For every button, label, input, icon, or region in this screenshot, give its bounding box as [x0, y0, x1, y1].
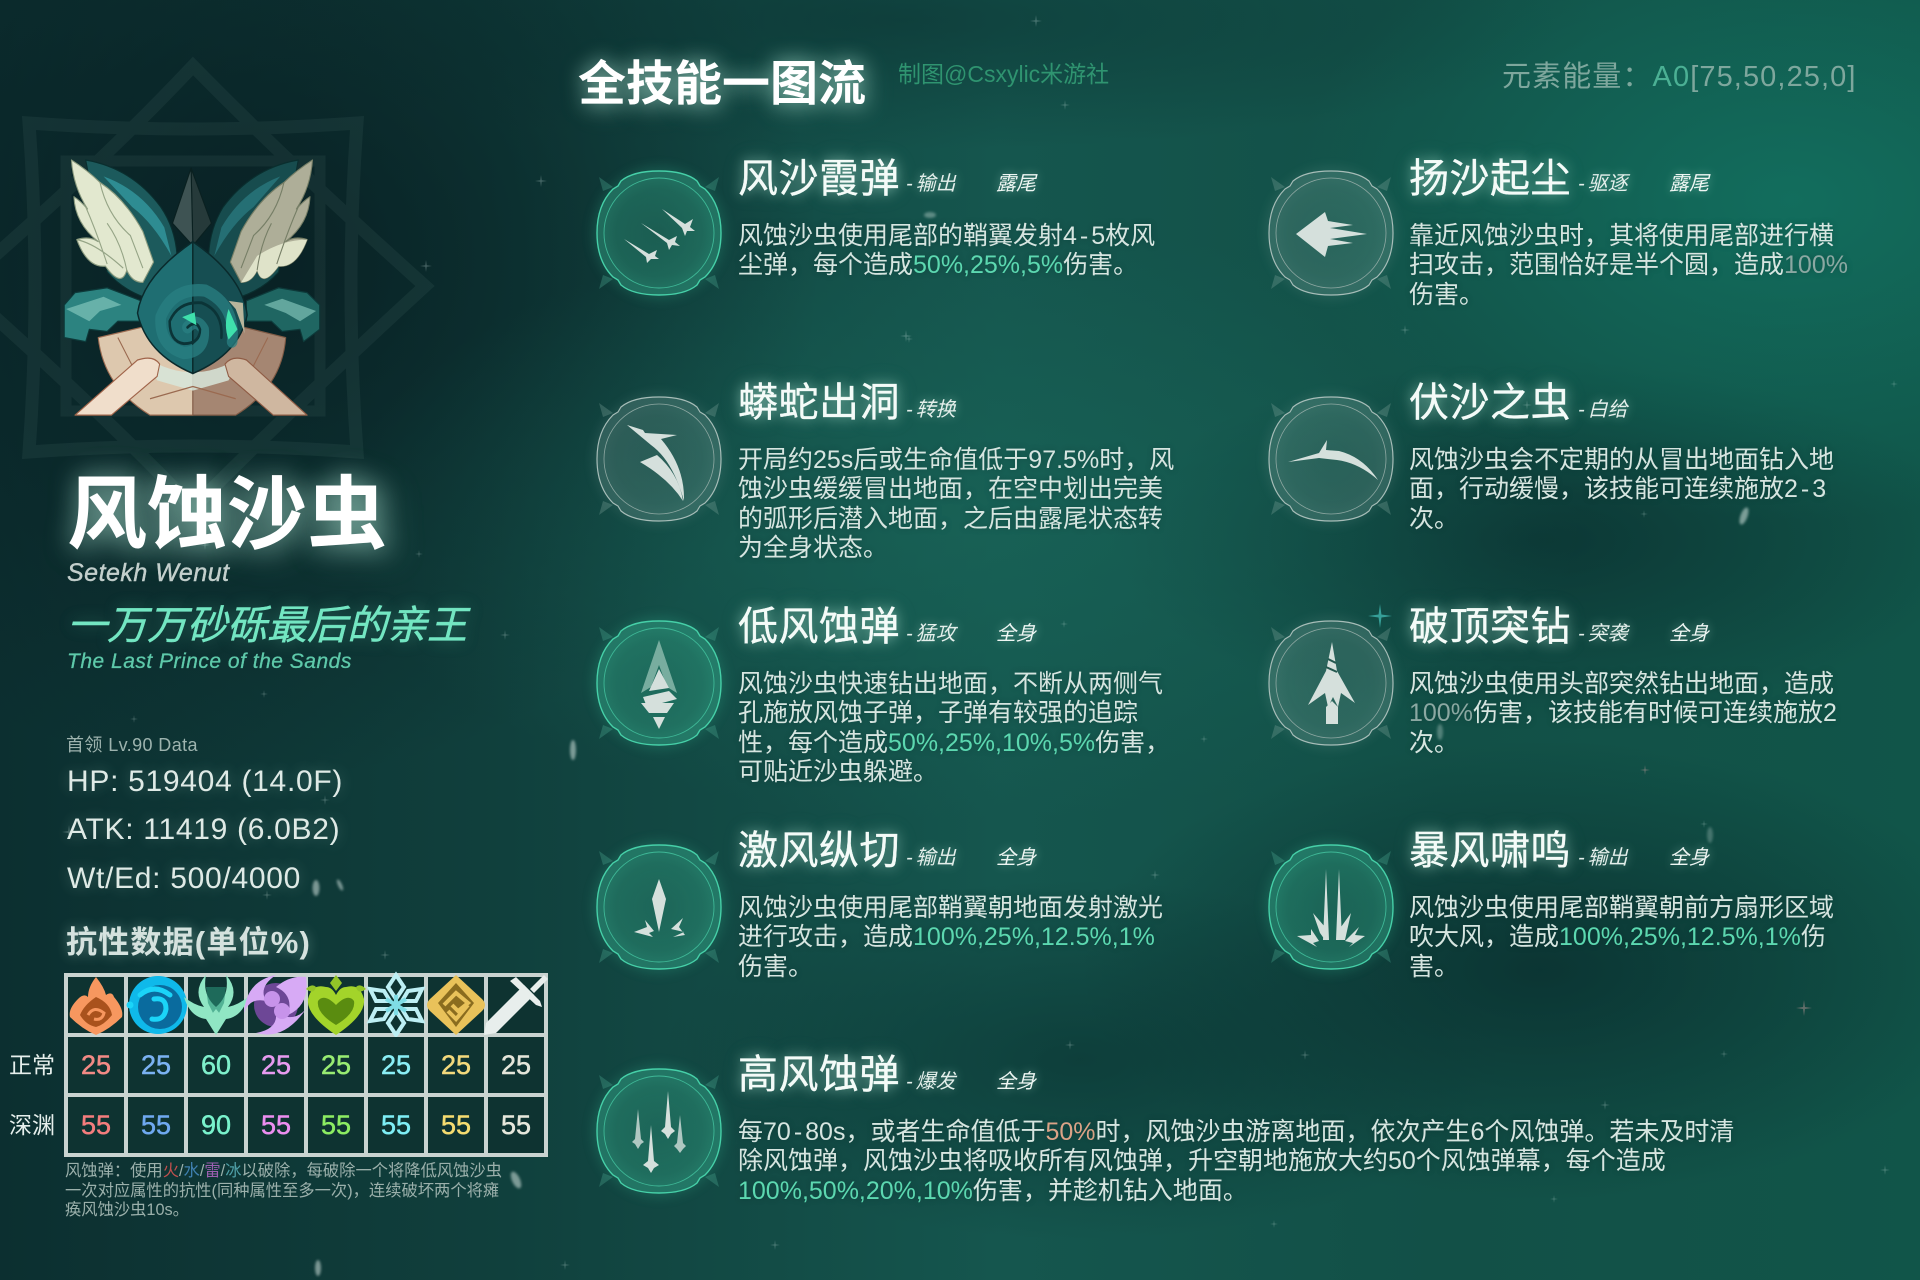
skill description: 开局约25s后或生命值低于97.5%时，风: [738, 446, 1174, 474]
icon: anemo: [188, 977, 244, 1033]
skill description: 伤害。: [738, 953, 813, 981]
resistance table: 25: [321, 1050, 351, 1080]
author credit: 制图@Csxylic米游社: [898, 61, 1109, 87]
skill role: -猛攻: [906, 623, 956, 645]
skill: 蟒蛇出洞: [593, 376, 1368, 562]
skill description: 为全身状态。: [738, 534, 888, 562]
icon: cryo: [368, 977, 424, 1033]
skill description: 风蚀沙虫使用头部突然钻出地面，造成: [1409, 670, 1834, 698]
resistance table: 25: [141, 1050, 171, 1080]
skill description: 除风蚀弹，风蚀沙虫将吸收所有风蚀弹，升空朝地施放大约50个风蚀弹幕，每个造成: [738, 1147, 1666, 1175]
skill description: 靠近风蚀沙虫时，其将使用尾部进行横: [1409, 222, 1834, 250]
cream feathers left: [71, 160, 154, 282]
table footnote: [65, 1162, 502, 1219]
dark wing backs: [86, 160, 177, 297]
skill: 风沙霞弹: [590, 152, 1394, 970]
abyss values: [68, 1097, 124, 1153]
skill role: -转换: [906, 399, 956, 421]
skill description: 风蚀沙虫使用尾部鞘翼朝地面发射激光: [738, 894, 1163, 922]
skill name: 激风纵切: [738, 829, 900, 873]
skill description: [1409, 894, 1834, 982]
english epithet: The Last Prince of the Sands: [67, 650, 352, 673]
resistance table: 25: [501, 1050, 531, 1080]
resistance table: [64, 973, 548, 1157]
boss portrait: [64, 159, 320, 416]
icon: hydro: [128, 977, 184, 1033]
crown spike: [191, 168, 211, 246]
background knot emblem: [0, 57, 434, 1034]
icon: curved tail: [593, 393, 1362, 525]
skill description: 伤害。: [1409, 281, 1484, 309]
skill role: -输出: [906, 847, 956, 869]
teal side plumes: [64, 288, 141, 342]
resistance table: 90: [201, 1110, 231, 1140]
skill description: 性，每个造成50%,25%,10%,5%伤害，: [738, 729, 1170, 757]
resistance heading: 抗性数据(单位%): [66, 925, 311, 960]
boss level label: 首领 Lv.90 Data: [66, 735, 198, 755]
skill state: 全身: [996, 847, 1036, 869]
skill state: 全身: [1669, 847, 1709, 869]
skill description: 进行攻击，造成100%,25%,12.5%,1%: [738, 923, 1155, 951]
skill description: 风蚀沙虫快速钻出地面，不断从两侧气: [738, 670, 1163, 698]
skill description: 可贴近沙虫躲避。: [738, 758, 938, 786]
skill description: 孔施放风蚀子弹，子弹有较强的追踪: [738, 699, 1138, 727]
skill description: 风蚀沙虫会不定期的从冒出地面钻入地: [1409, 446, 1834, 474]
skill: 激风纵切: [591, 824, 1368, 981]
atk stat: ATK: 11419 (6.0B2): [67, 813, 340, 846]
skill description: 的弧形后潜入地面，之后由露尾状态转: [738, 505, 1163, 533]
skill name: 风沙霞弹: [738, 157, 900, 201]
table footnote: 一次对应属性的抗性(同种属性至多一次)，连续破坏两个将瘫: [65, 1182, 499, 1200]
resistance table: 55: [321, 1110, 351, 1140]
icon: three darts: [590, 164, 1362, 302]
resistance table: 25: [441, 1050, 471, 1080]
normal values: [68, 1037, 124, 1093]
skill name: 暴风啸鸣: [1409, 829, 1571, 873]
skill: 高风蚀弹: [569, 1041, 1769, 1241]
skill role: -输出: [1578, 847, 1628, 869]
skill description: [1409, 446, 1834, 533]
table footnote: 风蚀弹：使用火/水/雷/冰以破除，每破除一个将降低风蚀沙虫: [65, 1162, 502, 1180]
skill description: 每70-80s，或者生命值低于50%时，风蚀沙虫游离地面，依次产生6个风蚀弹。若未及时清: [738, 1118, 1734, 1146]
skill description: 扫攻击，范围恰好是半个圆，造成100%: [1409, 251, 1848, 279]
icon: pyro: [68, 977, 124, 1033]
icon: arc worm: [1265, 393, 1397, 525]
skill description: 吹大风，造成100%,25%,12.5%,1%伤: [1409, 923, 1826, 951]
icon: spiral bullet: [591, 615, 1362, 752]
skill name: 扬沙起尘: [1409, 157, 1571, 201]
skill: 破顶突钻: [1266, 600, 1837, 757]
skill description: [738, 894, 1163, 981]
skill description: [1409, 670, 1837, 757]
row label: normal: 正常: [9, 1052, 55, 1078]
icon: electro: [248, 977, 304, 1033]
english name: Setekh Wenut: [67, 559, 230, 587]
skill description: [738, 222, 1155, 279]
icon: dendro: [308, 977, 364, 1033]
main title: 全技能一图流: [578, 58, 866, 111]
spiral head: [138, 242, 193, 373]
skill description: [738, 670, 1170, 786]
icon: fan wind: [1263, 839, 1400, 976]
icon: falling spikes: [569, 1041, 749, 1221]
icon: geo: [428, 977, 484, 1033]
skill state: 露尾: [996, 173, 1036, 195]
skill description: 尘弹，每个造成50%,25%,5%伤害。: [738, 251, 1138, 279]
resistance table: 55: [381, 1110, 411, 1140]
icon: laser burst: [591, 839, 1362, 976]
skill state: 全身: [1669, 623, 1709, 645]
weight and endurance stat: Wt/Ed: 500/4000: [67, 862, 301, 895]
skill description: 100%伤害，该技能有时候可连续施放2: [1409, 699, 1837, 727]
row label: abyss: 深渊: [9, 1112, 55, 1138]
skill: 暴风啸鸣: [1263, 824, 1834, 981]
skill role: -爆发: [906, 1071, 956, 1093]
icon: swept arrow: [1265, 167, 1397, 299]
skill description: 面，行动缓慢，该技能可连续施放2-3: [1409, 475, 1826, 503]
skill description: [1409, 222, 1848, 309]
skill description: 100%,50%,20%,10%伤害，并趁机钻入地面。: [738, 1177, 1248, 1205]
hp stat: HP: 519404 (14.0F): [67, 765, 343, 798]
icon: physical: [488, 977, 544, 1033]
skill state: 全身: [996, 1071, 1036, 1093]
resistance table: 55: [501, 1110, 531, 1140]
boss name: 风蚀沙虫: [67, 470, 387, 559]
skill name: 伏沙之虫: [1409, 381, 1571, 425]
skill description: 害。: [1409, 953, 1459, 981]
skill: 低风蚀弹: [591, 600, 1368, 786]
skill role: -输出: [906, 173, 956, 195]
resistance table: 55: [441, 1110, 471, 1140]
skill name: 蟒蛇出洞: [738, 381, 900, 425]
skill: 伏沙之虫: [1265, 378, 1834, 533]
skill name: 高风蚀弹: [738, 1053, 900, 1097]
arms: [75, 358, 160, 415]
resistance table: 55: [141, 1110, 171, 1140]
skill description: 风蚀沙虫使用尾部鞘翼朝前方扇形区域: [1409, 894, 1834, 922]
abyss values: 55: [81, 1110, 111, 1140]
table footnote: 痪风蚀沙虫10s。: [65, 1201, 189, 1219]
skill description: 风蚀沙虫使用尾部的鞘翼发射4-5枚风: [738, 222, 1155, 250]
skill description: 次。: [1409, 505, 1459, 533]
skill role: -白给: [1578, 399, 1628, 421]
normal values: 25: [81, 1050, 111, 1080]
skill description: [738, 1118, 1734, 1206]
icon: drill head: [1266, 617, 1397, 749]
resistance table: 25: [381, 1050, 411, 1080]
boss epithet: 一万万砂砾最后的亲王: [67, 604, 467, 648]
skill role: -驱逐: [1578, 173, 1628, 195]
skill role: -突袭: [1578, 623, 1628, 645]
skill name: 低风蚀弹: [738, 605, 900, 649]
skill description: 蚀沙虫缓缓冒出地面，在空中划出完美: [738, 475, 1163, 503]
resistance table: 55: [261, 1110, 291, 1140]
elemental energy note: 元素能量：A0[75,50,25,0]: [1502, 61, 1857, 93]
chest plate: [98, 325, 193, 415]
skill description: [738, 446, 1174, 562]
cream feathers right: [230, 160, 312, 282]
resistance table: 25: [261, 1050, 291, 1080]
skill name: 破顶突钻: [1409, 605, 1571, 649]
skill state: 露尾: [1669, 173, 1709, 195]
skill: 扬沙起尘: [1265, 152, 1848, 309]
resistance table: 60: [201, 1050, 231, 1080]
skill description: 次。: [1409, 729, 1459, 757]
skill state: 全身: [996, 623, 1036, 645]
